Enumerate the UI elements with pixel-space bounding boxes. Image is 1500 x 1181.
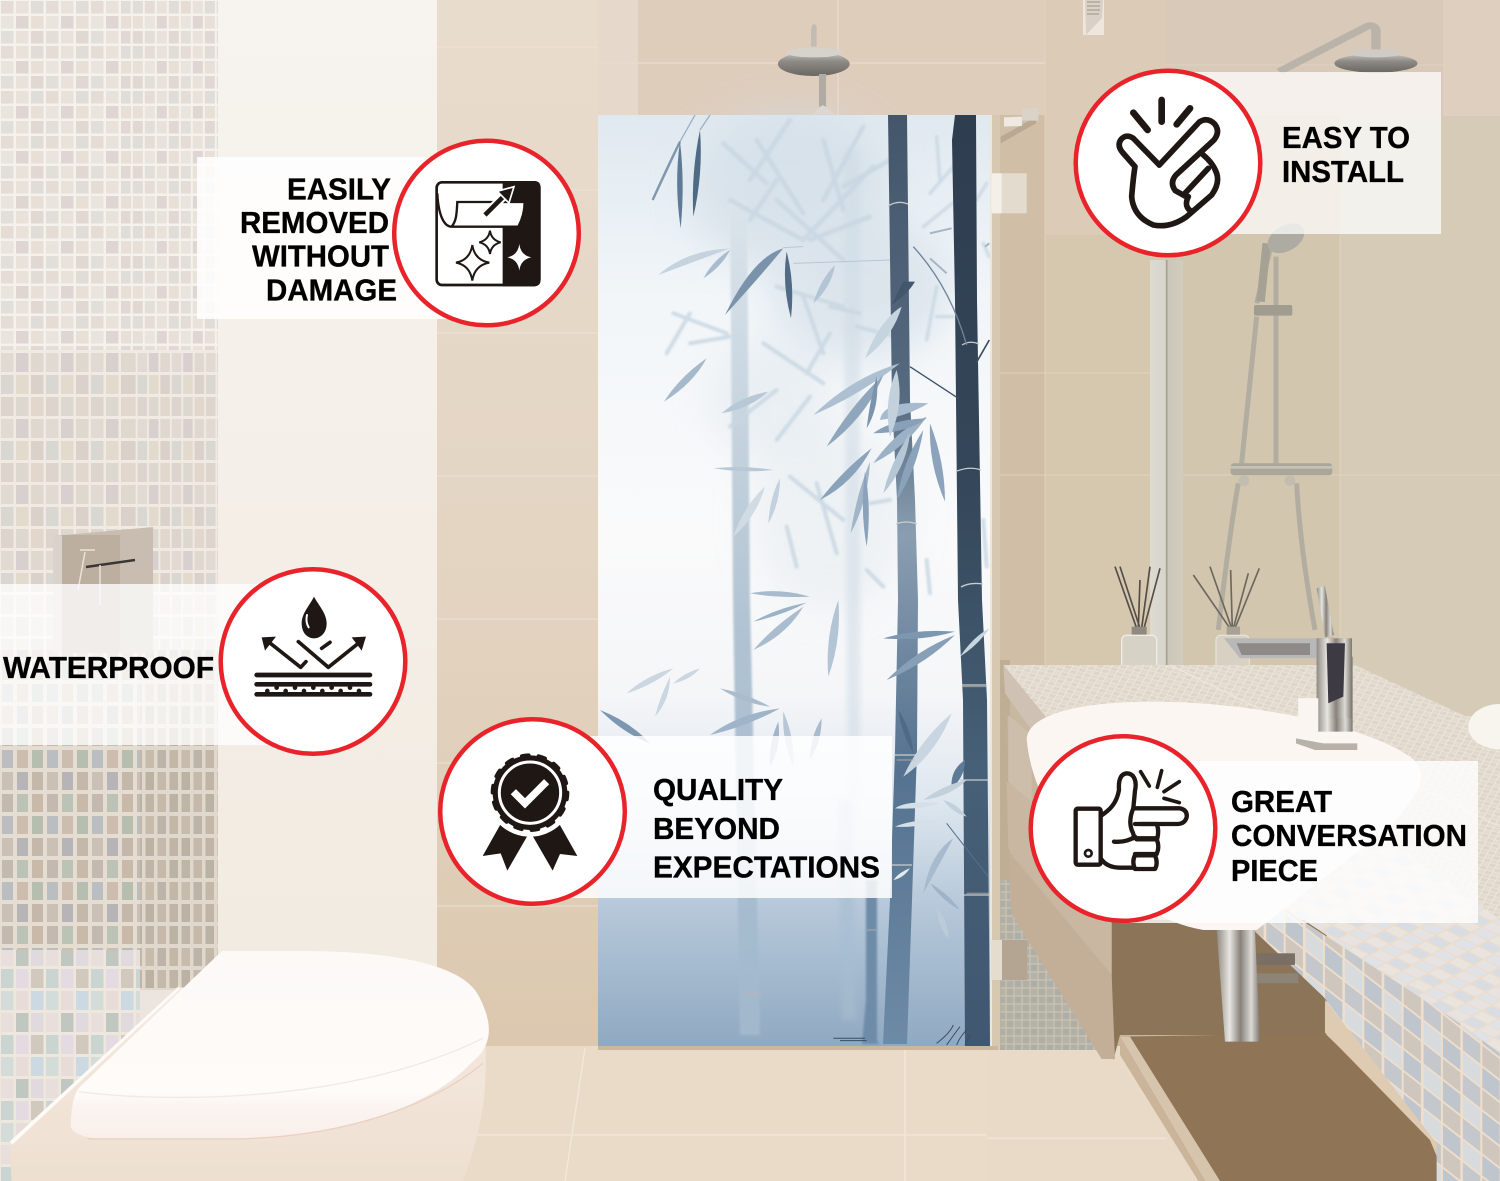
badge circle [1031,736,1215,921]
text: easily removed without damage: WITHOUT [252,238,389,274]
bamboo background stalks [730,150,879,1044]
callout: waterproof [0,569,405,754]
bamboo dark stalks [883,115,990,1048]
text: great conversation piece [1231,784,1467,888]
badge circle [440,719,625,904]
cabinet back and shelf [1110,920,1327,1060]
text: easy to install: EASY TO [1282,120,1410,155]
badge circle [221,569,405,754]
text: easy to install [1282,120,1410,189]
label background [1123,761,1478,923]
pale bamboo foliage strokes [667,120,989,593]
faucet spout [1224,586,1352,732]
text: quality beyond expectations: QUALITY [653,772,783,807]
text: quality beyond expectations: EXPECTATIONS [653,850,880,884]
callout: quality beyond expectations [440,719,892,904]
panel: bamboo shower door film [598,110,990,1048]
counter top [1003,665,1500,1053]
callout: easily removed without damage [197,141,579,325]
icon: finger snap hand [1119,100,1218,226]
icon: thumbs up pointing hand [1076,771,1187,869]
text: great conversation piece: GREAT [1231,784,1332,819]
mosaic tile wall on the left [0,0,218,1181]
badge circle [394,141,579,325]
faucet [1298,698,1318,740]
text: easily removed without damage [240,172,397,308]
text: easy to install: INSTALL [1282,154,1404,189]
callout: easy to install [1076,71,1441,255]
toilet flush plate [53,527,153,653]
badge circle [1076,71,1260,255]
label background [1168,72,1441,234]
label background [0,584,313,745]
bamboo upper leaves [653,115,989,597]
text: easily removed without damage: DAMAGE [266,272,397,308]
toilet [10,951,489,1181]
basin [1027,702,1421,930]
vanity unit [987,657,1500,1181]
metal mirror band [1150,260,1183,670]
reflected shower rail [1218,217,1332,630]
reflected shower head [1279,26,1417,73]
text: waterproof: WATERPROOF [3,650,214,685]
door frame and hinges [598,108,1038,1050]
bamboo lower leaves [600,600,989,1045]
text: quality beyond expectations [653,772,880,884]
label background [197,157,487,319]
label background [532,736,892,898]
text: easily removed without damage: REMOVED [240,205,389,240]
icon: award rosette [483,751,577,871]
diffuser bottles [1115,567,1259,673]
text: great conversation piece: CONVERSATION [1231,818,1467,853]
beige wall tiles [437,0,598,1050]
text: great conversation piece: PIECE [1231,853,1318,888]
misty bamboo foliage [690,110,950,610]
icon: water repelling layers [257,597,370,694]
text: quality beyond expectations: BEYOND [653,811,780,846]
icon: peeling film and sparkles [437,181,541,286]
callout: great conversation piece [1031,736,1478,923]
text: easily removed without damage: EASILY [287,172,391,206]
drain [1253,953,1295,965]
white painted column [218,0,437,1050]
back wall above panel [598,0,1045,260]
drawers [1007,715,1112,1059]
floor [437,1046,1237,1181]
shower head [778,24,850,114]
right side walls and mirror [1000,0,1500,1065]
